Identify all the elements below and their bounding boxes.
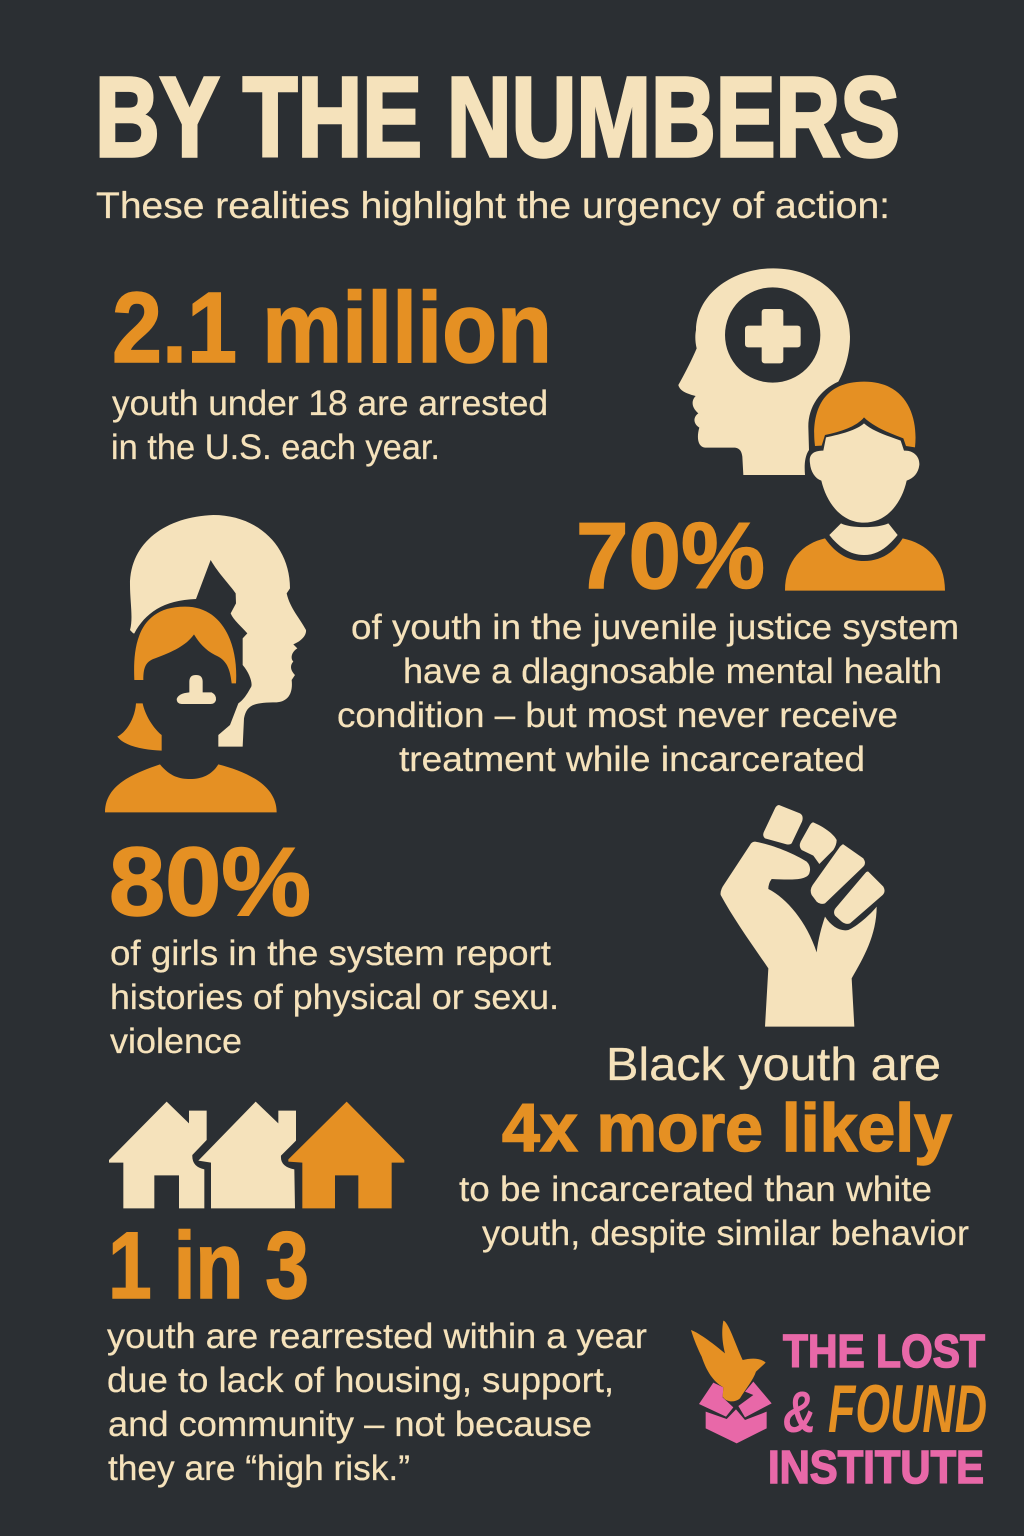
- logo text: INSTITUTE: INSTITUTE: [768, 1441, 984, 1493]
- text: violence description: of girls in the system report: [110, 934, 551, 973]
- text: incarceration description: to be incarcerated than white: [459, 1170, 932, 1209]
- text: arrests description: [111, 384, 548, 467]
- panel: 2.1 million stat: [111, 272, 552, 467]
- panel: 70% stat: [337, 503, 959, 779]
- text: arrests description: in the U.S. each year.: [111, 428, 440, 467]
- text: violence description: [110, 934, 559, 1061]
- icon: head with medical cross and youth: [678, 268, 945, 591]
- text: Black youth are: Black youth are: [606, 1038, 941, 1090]
- logo: The Lost & Found Institute: [691, 1321, 987, 1493]
- text: rearrest description: [107, 1317, 647, 1488]
- icon: raised fist: [721, 805, 885, 1027]
- text: incarceration description: youth, despite similar behavior: [482, 1214, 969, 1253]
- text: arrests description: youth under 18 are arrested: [112, 384, 548, 423]
- number: 70%: 70%: [576, 503, 765, 608]
- logo text: & FOUND: &: [783, 1380, 816, 1445]
- icon: bird rising from box: [691, 1321, 772, 1443]
- text: incarceration description: [459, 1170, 969, 1253]
- text: mental health description: have a dlagnosable mental health: [403, 652, 942, 691]
- text: rearrest description: youth are rearrested within a year: [107, 1317, 647, 1356]
- number: 1 in 3: 1 in 3: [108, 1213, 309, 1319]
- text: rearrest description: due to lack of housing, support,: [107, 1361, 614, 1400]
- logo text: & FOUND: [783, 1371, 987, 1447]
- text: violence description: histories of physical or sexu.: [110, 978, 559, 1017]
- number: 2.1 million: 2.1 million: [112, 272, 552, 384]
- subtitle: These realities highlight the urgency of action:: [96, 185, 890, 226]
- text: mental health description: treatment while incarcerated: [399, 740, 865, 779]
- panel: 80% stat: [109, 827, 559, 1061]
- icon: girl with adult profile: [105, 515, 306, 812]
- number: 80%: 80%: [109, 827, 311, 936]
- text: mental health description: condition – but most never receive: [337, 696, 898, 735]
- icon: three houses: [109, 1102, 404, 1208]
- number: 4x more likely: 4x more likely: [502, 1090, 952, 1166]
- text: rearrest description: and community – not because: [108, 1405, 592, 1444]
- logo text: THE LOST: THE LOST: [783, 1325, 985, 1377]
- text: mental health description: [337, 608, 959, 779]
- panel: 4x more likely stat: [459, 1038, 969, 1253]
- panel: 1 in 3 stat: [107, 1213, 647, 1488]
- text: mental health description: of youth in the juvenile justice system: [351, 608, 959, 647]
- text: rearrest description: they are “high risk.”: [108, 1449, 410, 1488]
- text: violence description: violence: [110, 1022, 242, 1061]
